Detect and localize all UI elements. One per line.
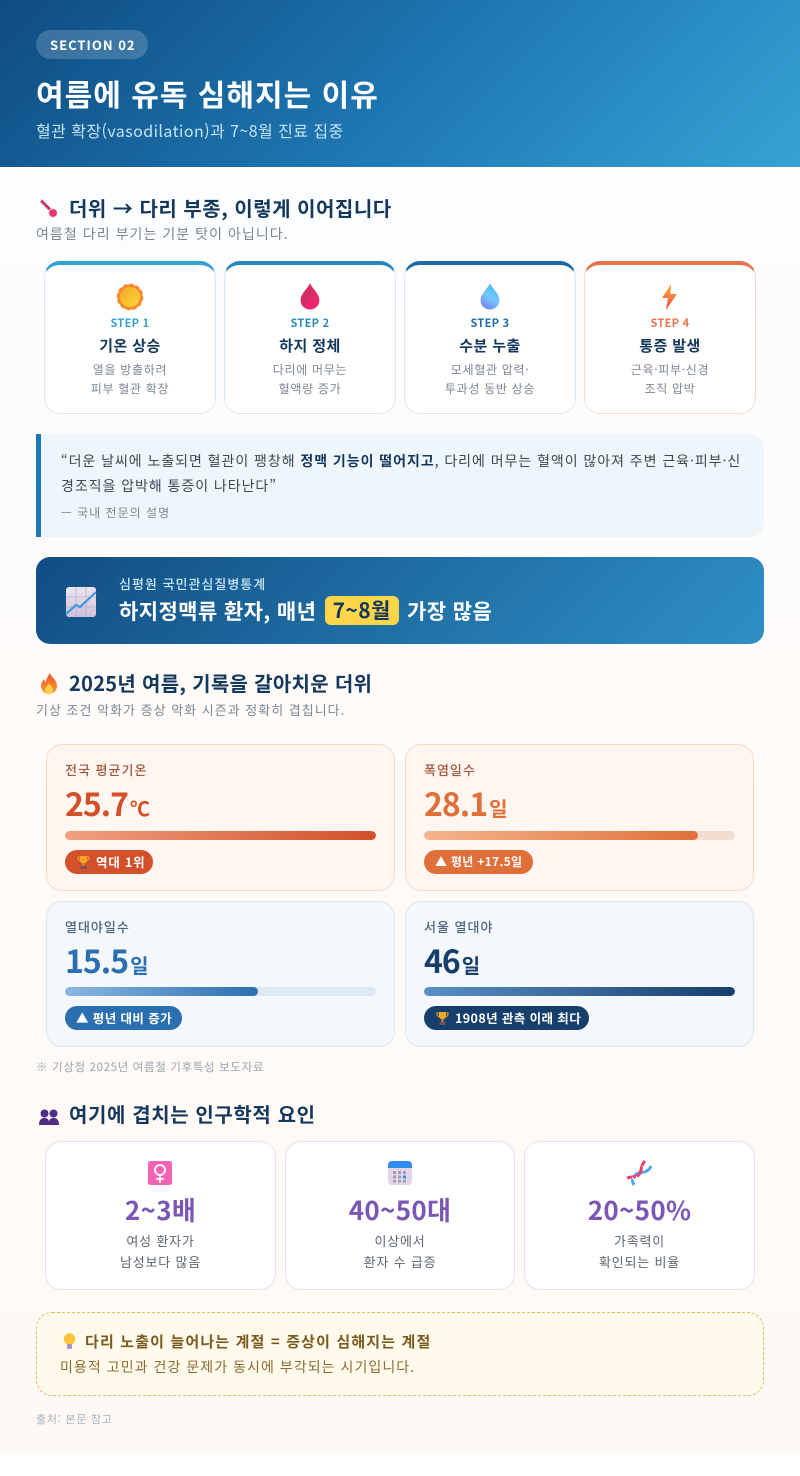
stat banner	[36, 557, 764, 644]
icon: thermometer	[40, 199, 58, 218]
subheading: 기상 조건 악화가 증상 악화 시즌과 정확히 겹칩니다.	[36, 700, 345, 719]
badge: 1908년 관측 이래 최다	[455, 1008, 581, 1027]
panel: step 2	[224, 261, 396, 414]
stat value: 28.1일	[424, 780, 507, 826]
quote callout	[36, 434, 764, 537]
demo text: 확인되는 비율	[599, 1252, 680, 1270]
section badge: SECTION 02	[50, 35, 136, 54]
heading: demographic factors: 여기에 겹치는 인구학적 요인	[69, 1099, 316, 1128]
badge: ▲ 평년 대비 증가	[76, 1008, 172, 1027]
step text	[631, 361, 709, 396]
demo text	[364, 1231, 436, 1270]
step text: 피부 혈관 확장	[91, 380, 169, 396]
badge	[424, 850, 533, 874]
title: 여름에 유독 심해지는 이유	[36, 71, 379, 115]
quote text: “더운 날씨에 노출되면 혈관이 팽창해 정맥 기능이 떨어지고, 다리에 머무는 혈액이 많아져 주변 근육·피부·신	[61, 451, 741, 471]
panel: heatwave days	[405, 744, 754, 891]
panel: Seoul tropical nights	[405, 901, 754, 1047]
badge: ▲ 평년 +17.5일	[435, 853, 522, 870]
step label: STEP 4	[651, 315, 689, 331]
icon: water drop	[480, 283, 500, 310]
progress bar	[424, 986, 735, 996]
step text: 다리에 머무는	[273, 361, 347, 378]
section badge	[36, 30, 148, 59]
icon: lightning	[662, 284, 677, 310]
stat value: 25.7℃	[65, 780, 150, 826]
demo text: 가족력이	[614, 1231, 665, 1250]
icon: female sign	[148, 1161, 172, 1185]
step label: STEP 2	[291, 315, 329, 331]
demo text	[599, 1231, 680, 1270]
icon: calendar	[388, 1161, 412, 1185]
step text	[91, 361, 169, 396]
step text	[445, 361, 535, 396]
step text: 조직 압박	[644, 380, 696, 396]
banner source: 심평원 국민관심질병통계	[119, 574, 266, 593]
demo text: 이상에서	[374, 1231, 426, 1250]
badge	[65, 850, 153, 874]
stat label: 열대야일수	[65, 917, 130, 936]
badge	[65, 1006, 182, 1030]
panel: female ratio	[45, 1141, 276, 1290]
heading: heat to swelling: 더위 → 다리 부종, 이렇게 이어집니다	[69, 193, 392, 222]
icon: people	[39, 1110, 59, 1125]
tip callout	[36, 1312, 764, 1396]
panel: step 1	[44, 261, 216, 414]
tip title: 다리 노출이 늘어나는 계절 = 증상이 심해지는 계절	[85, 1331, 431, 1352]
panel: tropical nights	[46, 901, 395, 1047]
stat value: 15.5일	[65, 937, 148, 983]
quote attribution: — 국내 전문의 설명	[61, 504, 170, 521]
step text: 모세혈관 압력·	[451, 361, 529, 378]
source footer: 출처: 본문 참고	[36, 1411, 113, 1427]
icon: chart	[65, 587, 97, 617]
icon: light bulb	[64, 1333, 76, 1349]
stat label: 서울 열대야	[424, 917, 493, 936]
subheading: 여름철 다리 부기는 기분 탓이 아닙니다.	[36, 224, 289, 244]
icon: trophy	[436, 1012, 448, 1025]
icon: dna	[626, 1160, 652, 1186]
badge: 역대 1위	[96, 852, 145, 871]
step text: 혈액량 증가	[279, 380, 341, 396]
header banner	[0, 0, 800, 167]
progress bar	[65, 986, 376, 996]
step title: 수분 누출	[459, 335, 521, 356]
stat label: 폭염일수	[424, 760, 476, 779]
step text	[273, 361, 347, 396]
banner statement: 7~8월	[333, 595, 391, 625]
source note: ※ 기상청 2025년 여름철 기후특성 보도자료	[36, 1059, 264, 1075]
demo value: 40~50대	[349, 1191, 451, 1228]
tip text: 미용적 고민과 건강 문제가 동시에 부각되는 시기입니다.	[60, 1357, 415, 1377]
stat label: 전국 평균기온	[65, 760, 147, 779]
step label: STEP 1	[111, 315, 149, 331]
subtitle: 혈관 확장(vasodilation)과 7~8월 진료 집중	[36, 118, 344, 142]
icon: flame	[41, 673, 57, 694]
step text: 투과성 동반 상승	[445, 380, 535, 396]
banner statement: 하지정맥류 환자, 매년 가장 많음	[119, 596, 492, 626]
panel: step 3	[404, 261, 576, 414]
step text: 열을 방출하려	[93, 361, 167, 378]
icon: trophy	[78, 856, 90, 869]
badge	[424, 1006, 589, 1030]
progress bar	[424, 830, 735, 840]
icon: red drop	[300, 283, 320, 310]
step title: 하지 정체	[279, 335, 341, 356]
demo text	[120, 1231, 201, 1270]
demo text: 여성 환자가	[126, 1231, 195, 1250]
panel: age group	[285, 1141, 515, 1290]
step label: STEP 3	[471, 315, 509, 331]
progress bar	[65, 830, 376, 840]
quote text	[61, 451, 741, 496]
demo text: 남성보다 많음	[120, 1252, 201, 1270]
demo value: 20~50%	[588, 1191, 691, 1228]
step text: 근육·피부·신경	[631, 361, 709, 378]
step title: 통증 발생	[639, 335, 701, 356]
demo value: 2~3배	[125, 1191, 196, 1228]
step title: 기온 상승	[99, 335, 161, 356]
demo text: 환자 수 급증	[364, 1252, 436, 1270]
panel: step 4	[584, 261, 756, 414]
quote text: 경조직을 압박해 통증이 나타난다”	[61, 476, 277, 496]
stat value: 46일	[424, 937, 480, 983]
icon: sun	[116, 284, 144, 310]
heading: record heat: 2025년 여름, 기록을 갈아치운 더위	[69, 668, 372, 697]
panel: national average temperature	[46, 744, 395, 891]
panel: family history	[524, 1141, 755, 1290]
